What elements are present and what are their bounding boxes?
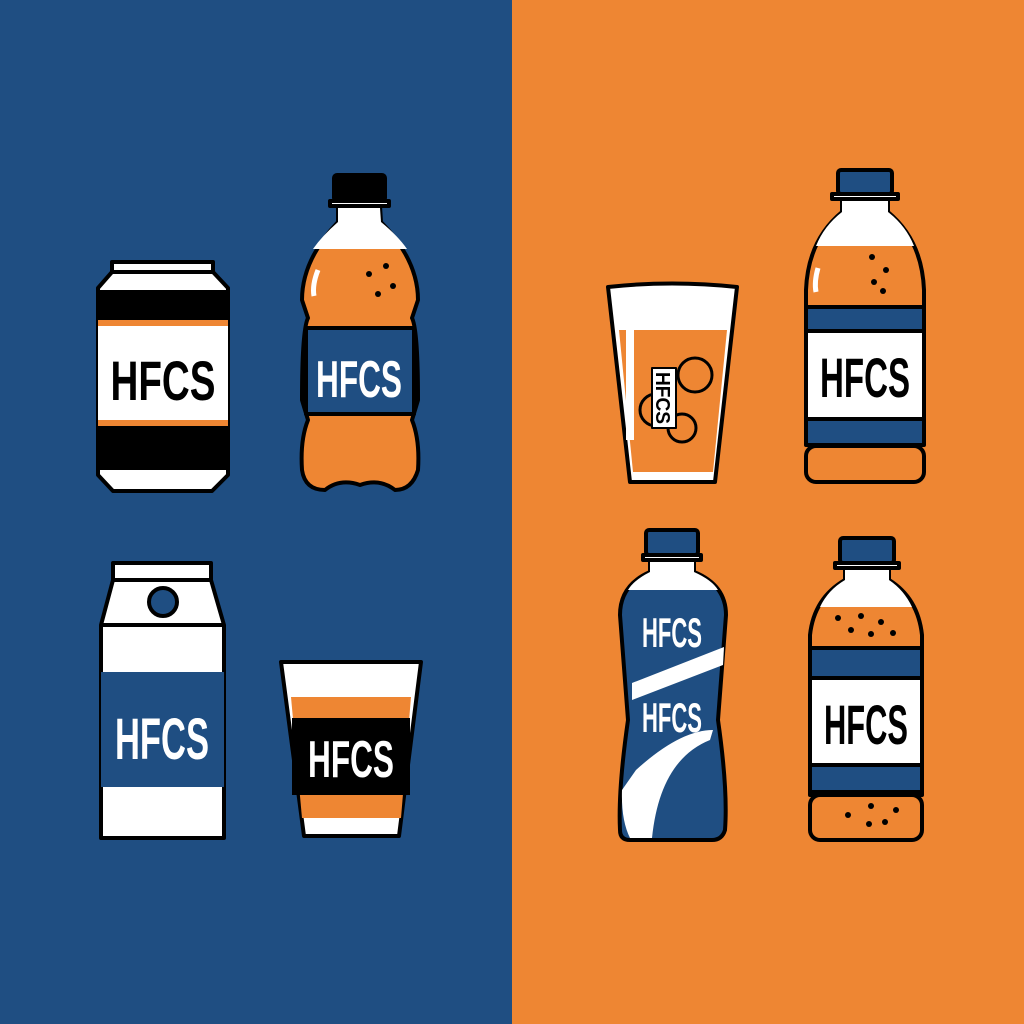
- icon: orange juice glass: HFCS: [651, 372, 673, 424]
- icon: milk carton: HFCS: [115, 707, 209, 772]
- icon: orange bottle with white label (bottom right): [810, 538, 922, 840]
- icon: orange bottle with white label (top right): HFCS: [820, 346, 910, 409]
- icon: glass with label: [281, 662, 421, 836]
- icon: orange juice glass: [608, 284, 737, 482]
- panel: blue background: [0, 0, 512, 1024]
- icon: orange soda bottle: [302, 175, 418, 490]
- icon: soda can: [98, 262, 228, 491]
- icon: orange bottle with white label (bottom right): HFCS: [824, 693, 908, 756]
- icon: soda can: HFCS: [110, 349, 216, 412]
- panel: orange background: [512, 0, 1024, 1024]
- icon: milk carton: [101, 563, 224, 838]
- icon: blue sports bottle: HFCS: [642, 609, 702, 656]
- icon: glass with label: HFCS: [308, 731, 394, 789]
- icon: orange bottle with white label (top right): [806, 170, 924, 482]
- icon: orange soda bottle: HFCS: [316, 351, 402, 409]
- icon: blue sports bottle: HFCS: [642, 694, 702, 741]
- icon: blue sports bottle: [620, 530, 726, 840]
